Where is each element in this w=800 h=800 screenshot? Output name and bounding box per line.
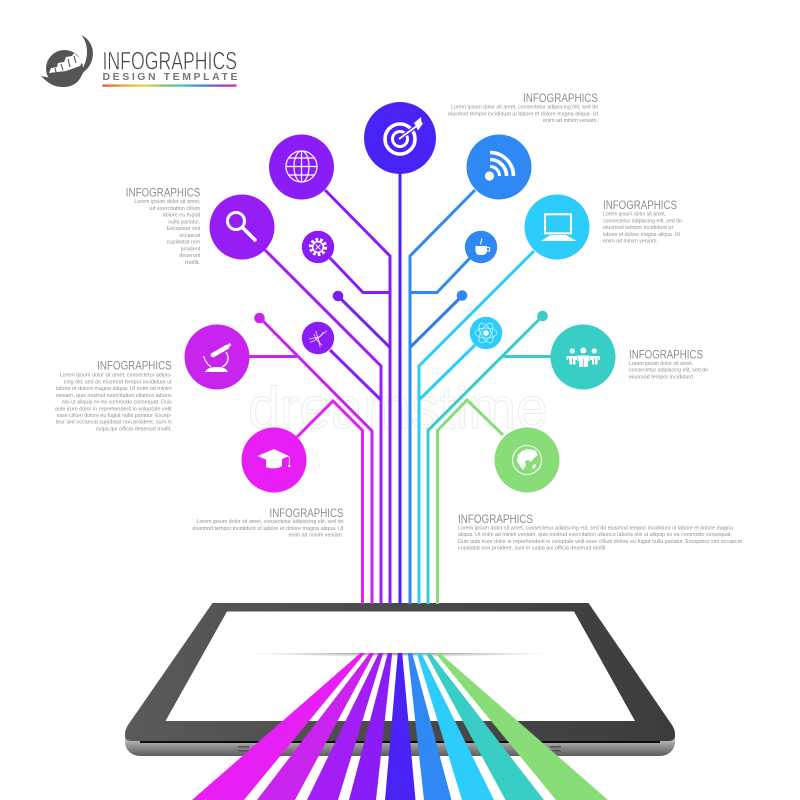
icon: globe [269,134,334,200]
line end dots [254,290,548,323]
logo title: INFOGRAPHICS [102,48,237,76]
body [629,361,708,380]
tablet [125,603,675,756]
body: cupidatat non [167,240,200,246]
body: Lorem ipsum dolor sit amet, [603,211,666,217]
icon: people [550,324,616,390]
heading: INFOGRAPHICS [603,198,677,212]
body: Lorem ipsum dolor sit amet, consectetur adipiscing elit, sed do [451,104,598,110]
body: occaecat [179,233,201,239]
body: enim ad minim veniam. [288,533,344,539]
body: consectetur adipiscing elit, sed do [629,368,708,374]
body: aute irure dolor in reprehenderit in voluptate velit [55,406,172,412]
heading: INFOGRAPHICS [126,185,200,199]
body: cupidatat non proident, sunt in culpa qui officia deserunt mollit. [458,546,607,552]
body: deserunt [179,253,201,259]
text block: magnifier [126,185,201,266]
logo [41,35,238,87]
body: nulla pariatur. [168,219,201,225]
heading: INFOGRAPHICS [270,506,344,520]
icon: dna [302,322,334,354]
icon: gear [302,231,334,263]
icon: graduation cap [242,428,306,492]
body [55,372,172,433]
body: cing elit, sed do eiusmod tempor incididunt ut [64,379,172,385]
body [458,525,742,552]
body: proident [181,246,201,252]
body [603,211,682,245]
body: Lorem ipsum dolor sit amet, [629,361,693,367]
body: eiusmod tempor incididunt ut labore et dolore magna aliqua. Ut [192,526,344,532]
tablet screen [166,612,635,721]
icon: monitor [524,194,590,260]
body: Lorem ipsum dolor sit amet, [134,199,201,205]
icon: rss [466,134,532,200]
speakers [238,746,561,752]
body: mollit. [185,260,201,266]
body: teur sint occaecat cupidatat non proident, sunt in [56,420,172,426]
body: eiusmod tempor incididunt [629,374,693,380]
icon: magnifier [210,194,274,260]
body: Lorem ipsum dolor sit amet, consectetur adipis- [60,372,172,378]
watermark: dreamstime [248,376,548,441]
body: eiusmod tempor incididunt ut labore et dolore magna aliqua. Ut [448,111,598,117]
icon: microscope [184,324,250,390]
icon: atom [470,317,502,349]
icon: logo mark [41,35,93,87]
body [134,199,201,266]
tablet bezel [125,603,675,741]
body: Lorem ipsum dolor sit amet, consectetur adipiscing elit, sed do [196,519,344,525]
light rays [192,653,608,800]
heading: INFOGRAPHICS [458,512,533,526]
body: culpa qui officia deserunt mollit. [96,427,172,433]
text block: monitor [603,198,682,245]
fold shadow [240,653,560,661]
heading: INFOGRAPHICS [97,358,172,372]
tablet base edge [125,738,675,756]
body: dolore eu fugiat [163,213,201,219]
text block: graduation [192,506,344,539]
heading: INFOGRAPHICS [629,348,703,362]
body: Lorem ipsum dolor sit amet, consectetur adipiscing elit, sed do eiusmod tempor incididunt ut labore et dolore magna [458,525,734,531]
body: ud exercitation cillum [149,206,201,212]
text block: people [629,348,708,380]
body: Duis aute irure dolor in reprehenderit in voluptate velit esse cillum dolore eu fugiat nulla pariatur. Excepteur sint occaecat [458,539,742,545]
body: enim ad minim veniam. [603,239,658,245]
text block: target [448,91,598,124]
body: aliqua. Ut enim ad minim veniam, quis nostrud exercitation ullamco laboris nisi ut aliquip ex ea commodo consequat. [458,532,732,538]
text block: microscope [55,358,172,433]
body: nisi ut aliquip ex ea commodo consequat. Duis [62,400,172,406]
heading: INFOGRAPHICS [523,91,598,105]
body: Excepteur sint [167,226,201,232]
logo subtitle: DESIGN TEMPLATE [102,71,238,83]
body: labore et dolore magna aliqua. Ut enim ad minim [56,386,172,392]
icon: target [364,102,436,174]
icon: coffee [465,231,497,263]
body: veniam, quis nostrud exercitation ullamco laboris [56,393,172,399]
body: consectetur adipiscing elit, sed do [603,218,682,224]
body [448,104,598,124]
body: enim ad minim veniam. [543,118,598,124]
body: esse cillum dolore eu fugiat nulla pariatur. Excep- [57,413,172,419]
body [192,519,344,539]
circuit tree lines [248,172,551,604]
text block: earth [458,512,742,552]
body: eiusmod tempor incididunt ut [603,225,673,231]
rainbow bar [102,84,236,87]
icon: earth [494,428,560,492]
body: labore et dolore magna aliqua. Ut [603,232,680,238]
